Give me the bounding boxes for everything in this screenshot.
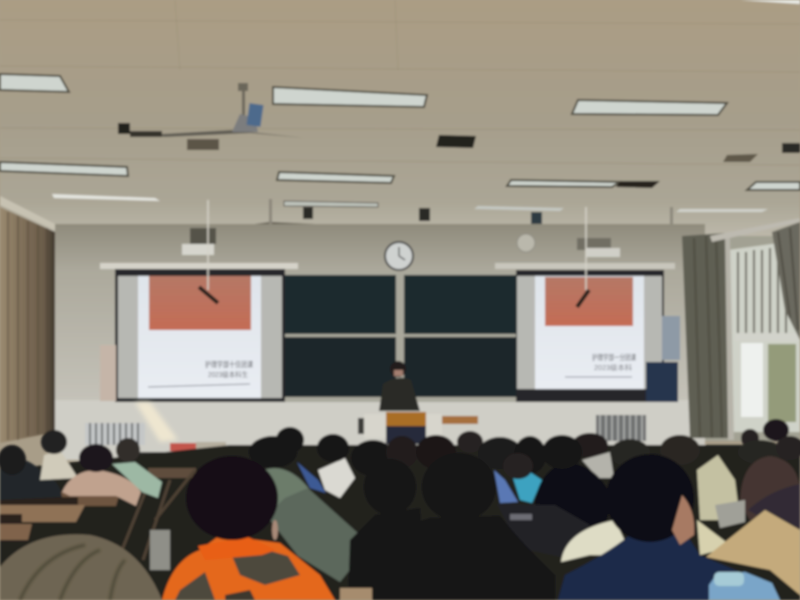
- slide caption: 护理学部一分团课: [592, 352, 636, 362]
- wall lower band: [55, 400, 695, 460]
- student: front black puffer: [370, 516, 555, 600]
- student: cream coat: [561, 520, 632, 562]
- blackboards: [278, 272, 520, 402]
- radiators and glare on front wall: [85, 402, 646, 466]
- projection screen: right: 2023级本科: [594, 363, 632, 372]
- student: striped top: [62, 470, 141, 506]
- students centre back row: [318, 458, 355, 498]
- student: blue jacket sliver: [297, 462, 326, 493]
- student: turquoise top: [513, 472, 542, 503]
- ceiling lights: [0, 0, 800, 236]
- left wall curtain: [0, 196, 55, 443]
- student: orange camouflage coat: [162, 535, 335, 600]
- speaker at lectern: [379, 361, 420, 411]
- student: blue coat: [494, 470, 518, 503]
- podium and speaker: [358, 361, 478, 444]
- student: green grey hooded jacket: [262, 468, 362, 582]
- audience front row: [0, 453, 780, 600]
- student: dark coat with bag: [497, 504, 590, 560]
- wall fixtures: clock, projector boxes: [100, 228, 675, 270]
- student: blonde hair head in foreground: [0, 534, 162, 600]
- projection screen: left: [115, 269, 285, 402]
- student: right long hair: [740, 456, 800, 530]
- icon: water bottle: [709, 572, 780, 600]
- student: mint hoodie: [112, 462, 162, 498]
- audience middle rows: [249, 436, 800, 600]
- student: black jacket centre-left: [348, 508, 425, 600]
- hanging microphones: [199, 200, 589, 307]
- right wall poster and left wall notice: [100, 316, 680, 402]
- audience far rows: [0, 419, 800, 540]
- student: navy jacket: [558, 525, 780, 600]
- projection screen: left: 2023级本科生: [208, 370, 248, 379]
- ceiling: [0, 0, 800, 238]
- tan paper on desk: [706, 510, 800, 595]
- student: black coat: [534, 462, 612, 528]
- student: left dark coat: [0, 459, 62, 500]
- desk front: [340, 588, 372, 600]
- icon: wall clock: [385, 242, 413, 270]
- ceiling fans and vents: [118, 83, 800, 234]
- classroom floor base: [0, 445, 800, 600]
- student: white top: [40, 450, 78, 480]
- back wall: [55, 224, 705, 459]
- slide caption: 护理学部十佳团课: [205, 359, 253, 369]
- projection screen: right: [516, 270, 664, 402]
- desks on the left: [0, 468, 196, 570]
- right window and curtains: [682, 218, 800, 441]
